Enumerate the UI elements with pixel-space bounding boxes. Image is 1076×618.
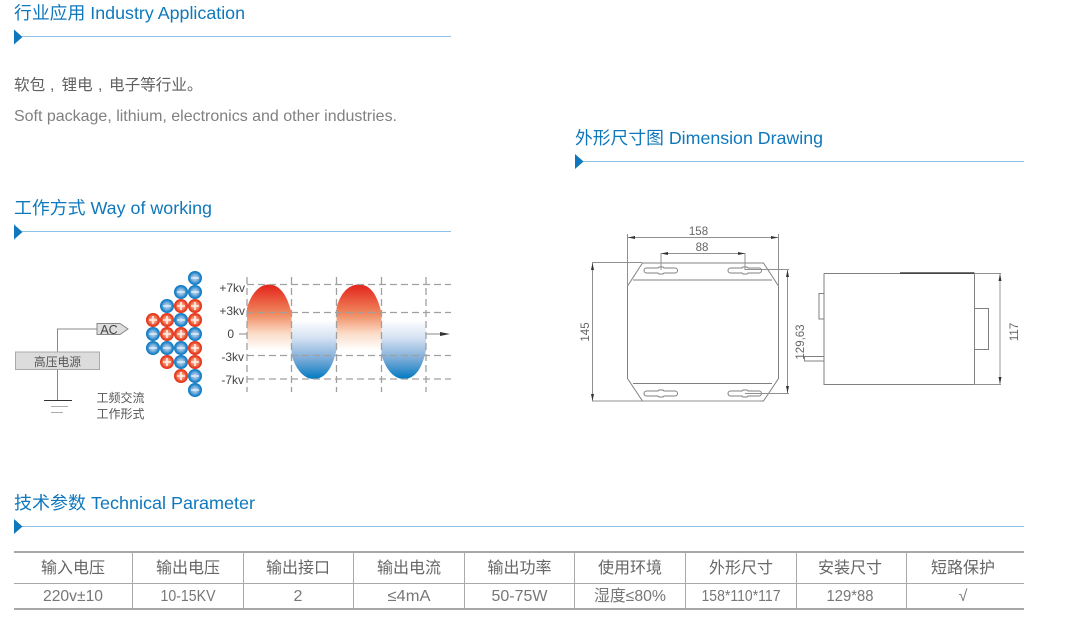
dimension 88 <box>661 242 745 270</box>
plate outline <box>628 263 778 401</box>
table value row: 50-75W <box>492 588 548 605</box>
side view drawing <box>804 273 1021 384</box>
table header row: 输出接口 <box>266 559 330 577</box>
heading: industry application: 行业应用 Industry Application <box>14 3 245 23</box>
table header row: 短路保护 <box>931 559 995 577</box>
table header row: 输出功率 <box>487 559 552 577</box>
dimension 117: 117 <box>1009 323 1021 341</box>
circuit caption: 工作形式 <box>96 407 145 421</box>
dimension 129,63 <box>745 270 807 394</box>
text block: Chinese description: , <box>50 77 54 94</box>
heading marker <box>575 154 1024 169</box>
panel: dimension drawing <box>575 128 1024 401</box>
parameter table <box>14 552 1024 609</box>
table header row: 安装尺寸 <box>818 559 882 577</box>
text block: Chinese description: 软包 <box>14 76 45 94</box>
housing <box>824 273 1001 384</box>
dimension 145: 145 <box>580 322 592 342</box>
panel: way of working <box>14 198 451 421</box>
table value row: 158*110*117 <box>702 588 781 605</box>
panel: technical parameter <box>14 493 1024 609</box>
dimension 117 <box>998 274 1021 384</box>
heading: way of working: 工作方式 Way of working <box>14 198 212 218</box>
table value row: 129*88 <box>826 588 874 605</box>
heading marker <box>14 224 451 240</box>
voltage labels: +7kv <box>219 281 245 295</box>
panel: industry application <box>14 3 451 125</box>
table value row: ≤4mA <box>388 588 431 605</box>
circuit caption <box>96 390 145 421</box>
voltage labels <box>219 281 245 387</box>
voltage labels: +3kv <box>219 304 245 318</box>
table header row: 使用环境 <box>598 558 662 577</box>
circuit caption: 工频交流 <box>96 390 145 405</box>
heading: dimension drawing: 外形尺寸图 Dimension Drawing <box>575 128 823 148</box>
axis arrow <box>440 332 450 336</box>
negative half waves <box>292 320 426 379</box>
grid lines <box>247 277 451 392</box>
table value row: 220v±10 <box>43 588 103 605</box>
heading marker <box>14 30 451 44</box>
table header row: 输出电压 <box>156 559 220 577</box>
table value row: √ <box>959 588 968 605</box>
circuit diagram <box>16 323 145 421</box>
table value row: 2 <box>294 588 303 605</box>
AC waveform chart <box>219 277 451 392</box>
charge particles <box>146 271 202 397</box>
side tabs <box>804 294 988 361</box>
text block: Chinese description: , <box>98 77 102 94</box>
table header row: 输出电流 <box>377 559 441 577</box>
voltage labels: -7kv <box>221 373 244 387</box>
heading marker <box>14 519 1024 534</box>
voltage labels: 0 <box>227 327 234 341</box>
table header row: 外形尺寸 <box>709 559 773 577</box>
dimension 158 <box>628 226 778 286</box>
heading: technical parameter: 技术参数 Technical Parameter <box>14 493 255 513</box>
dimension 158: 158 <box>689 226 708 238</box>
text block: Chinese description: 电子等行业。 <box>109 76 203 94</box>
table header row <box>41 558 995 577</box>
table value row: 湿度≤80% <box>594 587 666 605</box>
high voltage power box: 高压电源 <box>34 355 81 369</box>
table value row <box>43 587 968 605</box>
dimension 129,63: 129,63 <box>795 324 807 360</box>
dimension 145 <box>580 262 760 401</box>
front view drawing <box>580 226 807 401</box>
table header row: 输入电压 <box>41 559 105 577</box>
dimension 88: 88 <box>696 242 708 254</box>
mounting slots <box>644 267 762 397</box>
positive half waves <box>247 284 382 350</box>
voltage labels: -3kv <box>221 350 244 364</box>
text block: English description: Soft package, lithium, electronics and other industries. <box>14 108 397 125</box>
text block: Chinese description: 锂电 <box>62 76 93 94</box>
ground symbol <box>44 400 72 412</box>
AC tag: AC <box>100 323 118 337</box>
table value row: 10-15KV <box>160 588 216 605</box>
